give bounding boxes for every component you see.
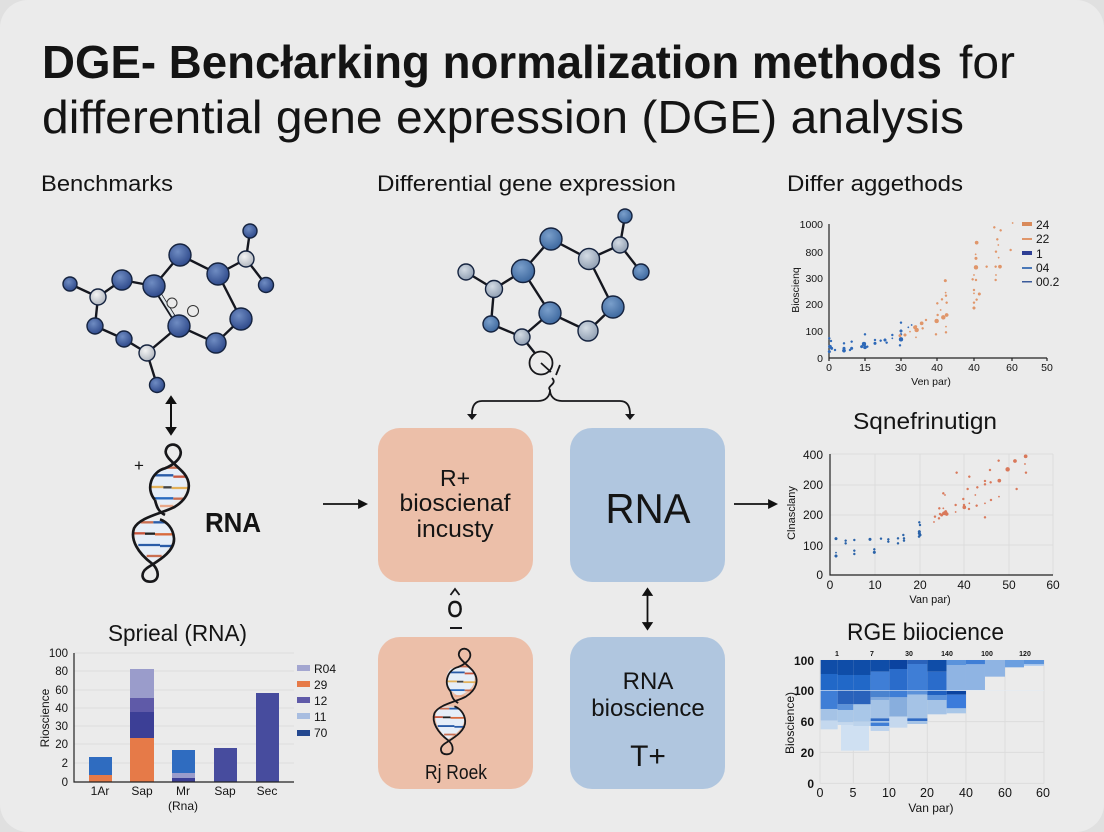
legend: 1 [1036, 247, 1043, 261]
y axis labels: 0 [807, 777, 814, 791]
y axis labels: 2 [62, 758, 68, 770]
x axis labels: Mr [176, 784, 190, 798]
y axis labels [800, 219, 823, 365]
y axis title: Clnasclany [786, 486, 798, 540]
panel: R+ bioscienaf incusty: incusty [416, 516, 494, 543]
legend: 00.2 [1036, 275, 1060, 289]
y axis labels: 20 [55, 739, 68, 751]
panel: R+ bioscienaf incusty: bioscienaf [400, 490, 511, 517]
heading: differential gene expression: Differential gene expression [377, 171, 676, 196]
label: Rj Roek: Rj Roek [425, 762, 488, 784]
title: for [959, 36, 1015, 88]
y axis labels: 80 [55, 666, 68, 678]
blue points [828, 322, 912, 353]
y axis labels: 0 [817, 353, 823, 365]
x axis labels: 60 [1036, 786, 1050, 800]
panel: RNA bioscience T+ [570, 637, 725, 789]
x axis labels: Sap [131, 784, 153, 798]
y axis labels: 100 [794, 654, 814, 668]
x axis labels: 60 [1046, 578, 1060, 592]
orange points [899, 222, 1013, 338]
top labels: 100 [981, 651, 993, 658]
legend: 11 [314, 710, 327, 724]
y axis labels: 200 [803, 478, 823, 492]
legend: 22 [1036, 232, 1050, 246]
chart: stacked bars [38, 620, 336, 813]
panel: R+ bioscienaf incusty [378, 428, 533, 582]
x axis labels: 40 [959, 786, 973, 800]
x axis title: Van par) [909, 594, 951, 606]
x axis labels [827, 578, 1060, 592]
arrow: RNA box to lower box [644, 589, 652, 629]
x axis labels: 40 [968, 362, 980, 374]
x axis labels: 10 [868, 578, 882, 592]
arrow: to right charts [734, 500, 776, 508]
heading: benchmarks: Benchmarks [41, 171, 173, 196]
heading: differ aggethods: Differ aggethods [787, 171, 963, 196]
x axis labels: 15 [859, 362, 871, 374]
title: differential gene expression (DGE) analysis [42, 91, 964, 143]
x axis labels [91, 784, 277, 813]
panel: RNA bioscience T+: T+ [630, 740, 666, 773]
y axis labels: 100 [49, 648, 68, 660]
legend [1022, 218, 1060, 289]
panel: RNA: RNA [606, 485, 690, 532]
chart: scatter middle right [786, 448, 1060, 606]
label: RNA: RNA [205, 507, 261, 538]
y axis labels: 100 [805, 326, 823, 338]
y axis labels: 40 [55, 703, 68, 715]
orange points [933, 455, 1027, 523]
arrow: to pink box [323, 500, 366, 508]
x axis labels: (Rna) [168, 799, 198, 813]
x axis labels: 20 [913, 578, 927, 592]
panel: RNA [570, 428, 725, 582]
panel: RNA bioscience T+: bioscience [591, 695, 705, 722]
panel: R+ bioscienaf incusty: R+ [440, 465, 470, 491]
top labels: 30 [905, 651, 913, 658]
icon: left DNA helix [133, 445, 189, 582]
top labels: 140 [941, 651, 953, 658]
y axis labels [49, 648, 68, 789]
title [42, 36, 1015, 143]
y axis labels: 0 [816, 568, 823, 582]
arrow: molecule to DNA [167, 397, 175, 434]
y axis labels: 0 [62, 777, 68, 789]
x axis labels: 0 [826, 362, 832, 374]
top labels [835, 651, 1031, 658]
x axis labels: 0 [817, 786, 824, 800]
x axis labels: 0 [827, 578, 834, 592]
x axis labels: 50 [1002, 578, 1016, 592]
y axis labels: 200 [805, 299, 823, 311]
heading: Sqnefrinutign: Sqnefrinutign [853, 408, 997, 434]
heading: Sprieal (RNA): Sprieal (RNA) [108, 620, 247, 646]
icon: plus: + [134, 456, 144, 475]
x axis labels: 60 [1006, 362, 1018, 374]
icon: center molecule [458, 209, 649, 375]
top labels: 7 [870, 651, 874, 658]
x axis labels: 40 [957, 578, 971, 592]
chart: heatmap [783, 651, 1050, 815]
legend: R04 [314, 662, 336, 676]
heading: RGE biiocience: RGE biiocience [847, 619, 1004, 646]
y axis labels: 20 [801, 746, 814, 760]
arrow: branching from center molecule [467, 378, 635, 420]
y axis title: Bioscience) [783, 692, 797, 754]
x axis labels: 40 [931, 362, 943, 374]
icon: DNA helix in box [434, 649, 477, 754]
y axis labels: 1000 [800, 219, 823, 231]
legend: 24 [1036, 218, 1050, 232]
x axis title: Van par) [908, 801, 954, 815]
y axis labels: 100 [794, 684, 814, 698]
title: DGE- Bencłarking normalization methods [42, 36, 942, 88]
chart: scatter top right [790, 218, 1060, 388]
x axis labels [826, 362, 1053, 374]
y axis labels: 200 [803, 508, 823, 522]
heat cells [820, 660, 1044, 783]
legend: 29 [314, 678, 328, 692]
x axis labels: 1Ar [91, 784, 109, 798]
legend [297, 662, 336, 740]
x axis labels: 10 [882, 786, 896, 800]
y axis labels: 800 [805, 247, 823, 259]
y axis labels: 100 [803, 539, 823, 553]
y axis title: Rioscience [38, 688, 52, 747]
y axis labels: 30 [55, 721, 68, 733]
icon: left molecule [63, 224, 274, 392]
y axis labels [794, 654, 814, 791]
x axis labels: Sap [214, 784, 236, 798]
top labels: 1 [835, 651, 839, 658]
x axis labels: 5 [850, 786, 857, 800]
x axis labels [817, 786, 1050, 800]
y axis labels: 60 [801, 715, 814, 729]
top labels: 120 [1019, 651, 1031, 658]
x axis labels: 20 [920, 786, 934, 800]
icon: circle with caret [448, 589, 462, 628]
y axis labels: 60 [55, 685, 68, 697]
x axis labels: 50 [1041, 362, 1053, 374]
panel: DNA Rj Roek [378, 637, 533, 789]
x axis labels: 60 [998, 786, 1012, 800]
legend: 04 [1036, 261, 1050, 275]
x axis title: Ven par) [911, 376, 951, 388]
y axis labels: 300 [805, 273, 823, 285]
icon: circle with caret: O [448, 596, 462, 622]
y axis labels [803, 448, 823, 582]
panel: RNA bioscience T+: RNA [623, 668, 673, 695]
y axis labels: 400 [803, 448, 823, 462]
x axis labels: 30 [895, 362, 907, 374]
bars [89, 669, 279, 782]
legend: 70 [314, 726, 328, 740]
legend: 12 [314, 694, 328, 708]
blue points [835, 521, 921, 557]
y axis title: Bioscienq [790, 267, 802, 313]
x axis labels: Sec [257, 784, 277, 798]
